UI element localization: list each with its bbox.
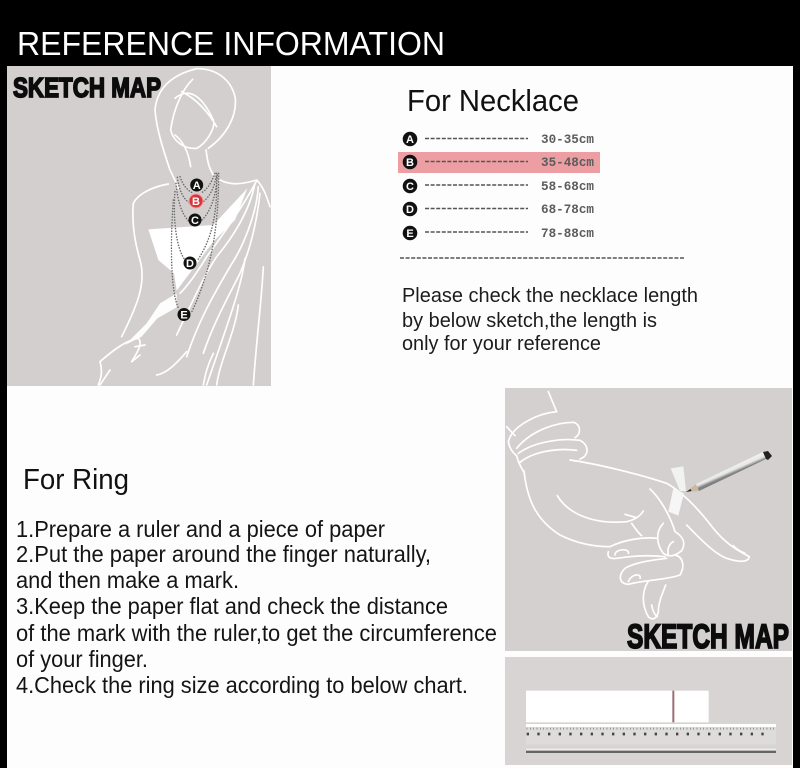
text block: ring instructions: of the mark with the ruler,to get the circumference xyxy=(16,620,497,646)
marker: D: D xyxy=(186,258,194,270)
row B xyxy=(403,155,594,170)
row A: A xyxy=(406,134,414,146)
heading: for necklace: For Necklace xyxy=(407,84,579,118)
marker: A xyxy=(190,178,203,192)
heading: sketch map: SKETCH MAP xyxy=(13,72,161,103)
paper strip xyxy=(668,466,686,516)
row B: B xyxy=(406,157,414,169)
row E xyxy=(403,226,594,241)
icon: pencil xyxy=(686,451,772,492)
text block: ring instructions: of your finger. xyxy=(16,646,148,672)
panel: hand sketch map xyxy=(505,388,792,656)
panel: ruler measurement xyxy=(505,657,792,765)
marker: A: A xyxy=(193,180,201,192)
ruler xyxy=(526,724,776,753)
text block: ring instructions xyxy=(16,516,497,698)
text block: necklace note: Please check the necklace length xyxy=(402,285,698,307)
text block: ring instructions: 3.Keep the paper flat and check the distance xyxy=(16,593,448,619)
text block: ring instructions: 4.Check the ring size according to below chart. xyxy=(16,672,468,698)
row C: C xyxy=(406,181,414,193)
necklace strands xyxy=(171,173,219,312)
text block: ring instructions: 2.Put the paper around the finger naturally, xyxy=(16,541,431,567)
marker: B xyxy=(188,194,204,208)
text block: necklace note: only for your reference xyxy=(402,333,601,355)
row D: D xyxy=(406,204,414,216)
text block: ring instructions: 1.Prepare a ruler and a piece of paper xyxy=(16,516,385,542)
illustration: hand with paper and pencil xyxy=(507,392,749,619)
text block: necklace note xyxy=(402,285,698,355)
row D: 68-78cm xyxy=(541,203,594,217)
paper strip with mark xyxy=(526,691,709,722)
text block: ring instructions: and then make a mark. xyxy=(16,567,239,593)
marker: C xyxy=(188,214,202,227)
row A: 30-35cm xyxy=(541,133,594,147)
table: necklace lengths xyxy=(398,132,600,241)
text block: necklace note: by below sketch,the length is xyxy=(402,310,657,332)
marker: B: B xyxy=(192,196,200,208)
heading: for ring: For Ring xyxy=(23,464,129,496)
illustration: woman in draped dress xyxy=(98,69,270,385)
row B: 35-48cm xyxy=(541,156,594,170)
highlight row B xyxy=(398,152,600,173)
marker: D xyxy=(184,256,196,270)
row E: E xyxy=(406,228,414,240)
row C xyxy=(403,179,594,194)
row C: 58-68cm xyxy=(541,180,594,194)
marker: C: C xyxy=(191,215,199,227)
marker: E xyxy=(178,308,190,322)
marker: E: E xyxy=(180,310,188,322)
row D xyxy=(403,202,594,217)
panel: necklace sketch map xyxy=(7,66,271,386)
row E: 78-88cm xyxy=(541,227,594,241)
title: REFERENCE INFORMATION xyxy=(17,25,445,62)
row A xyxy=(403,132,594,147)
